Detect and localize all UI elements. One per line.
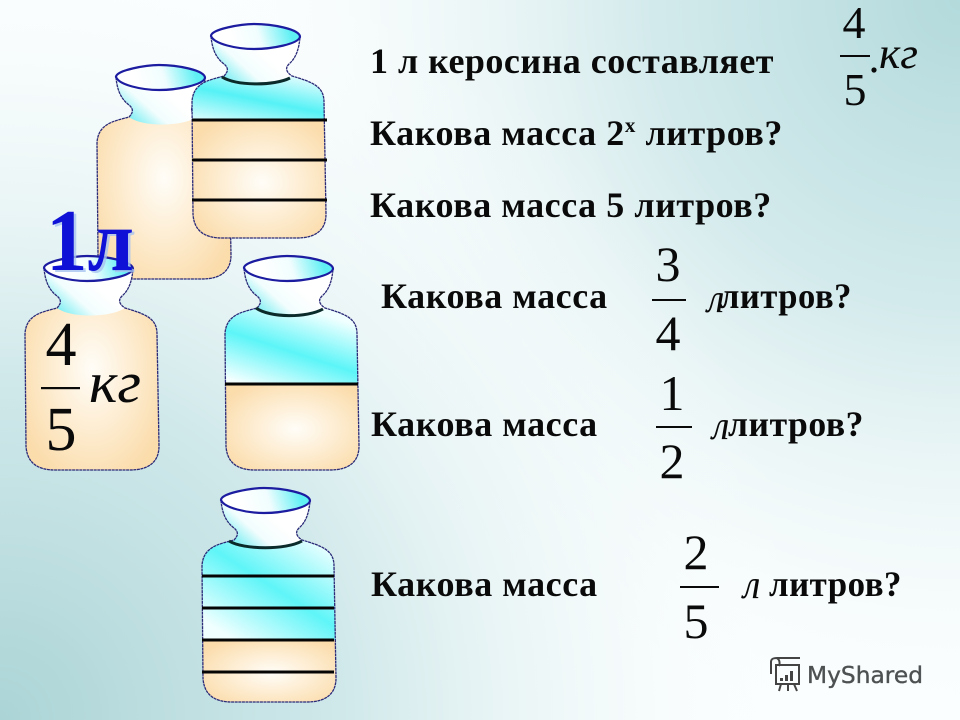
watermark: MyShared logo: MyShared — [807, 663, 923, 689]
question: mass of 3/4 litres: литров? — [720, 276, 852, 316]
fraction on bottle: 4/5 kg: кг — [89, 350, 141, 415]
question: mass of 2/5 litres: л — [741, 562, 760, 607]
large label: 1 litre: 1л — [46, 193, 134, 290]
question: mass of 3/4 litres: 3 — [656, 236, 680, 292]
large label: 1 litre: 1л — [48, 195, 136, 292]
bottle: half filled — [225, 256, 365, 474]
question: mass of 1/2 litres: 2 — [660, 433, 684, 489]
question: mass of 2x litres: x — [625, 113, 636, 137]
bottle: full one litre, back — [97, 65, 231, 279]
bottle: divided in four, three parts peach — [192, 24, 332, 245]
fraction on bottle: 4/5 kg: 5 — [46, 396, 76, 464]
question: mass of 2x litres: Какова масса 2 — [370, 113, 625, 153]
question: mass of 2/5 litres — [371, 524, 902, 649]
bottle: divided in five, two parts peach — [202, 488, 342, 706]
question: mass of 3/4 litres — [381, 236, 852, 361]
question: mass of 1/2 litres — [371, 365, 864, 489]
question: mass of 1/2 litres: Какова масса — [371, 404, 598, 444]
question: mass of 3/4 litres: Какова масса — [381, 276, 608, 316]
fraction: 4/5 kg top: 5 — [844, 64, 866, 115]
question: mass of 2/5 litres: Какова масса — [371, 564, 598, 604]
question: mass of 2/5 litres: 5 — [684, 593, 708, 649]
question: mass of 2/5 litres: литров? — [769, 564, 902, 604]
bottle: one litre weighing 4/5 kg — [25, 256, 159, 470]
question: mass of 1/2 litres: 1 — [660, 365, 684, 421]
fraction on bottle: 4/5 kg — [41, 311, 141, 464]
question: mass of 3/4 litres: 4 — [656, 305, 680, 361]
question: mass of 5 litres: Какова масса 5 литров? — [370, 185, 772, 225]
question: mass of 2x litres: литров? — [636, 113, 783, 153]
question: mass of 2/5 litres: 2 — [684, 524, 708, 580]
question: mass of 3/4 litres: л — [705, 276, 724, 321]
fraction on bottle: 4/5 kg: 4 — [46, 311, 76, 379]
fraction: 4/5 kg top: кг — [879, 29, 918, 78]
question: mass of 1/2 litres: л — [710, 403, 729, 448]
text: 1 litre of kerosene: 1 л керосина составляет — [370, 41, 774, 81]
fraction: 4/5 kg top — [840, 0, 918, 115]
question: mass of 1/2 litres: литров? — [728, 404, 864, 444]
watermark: MyShared logo — [771, 658, 923, 691]
